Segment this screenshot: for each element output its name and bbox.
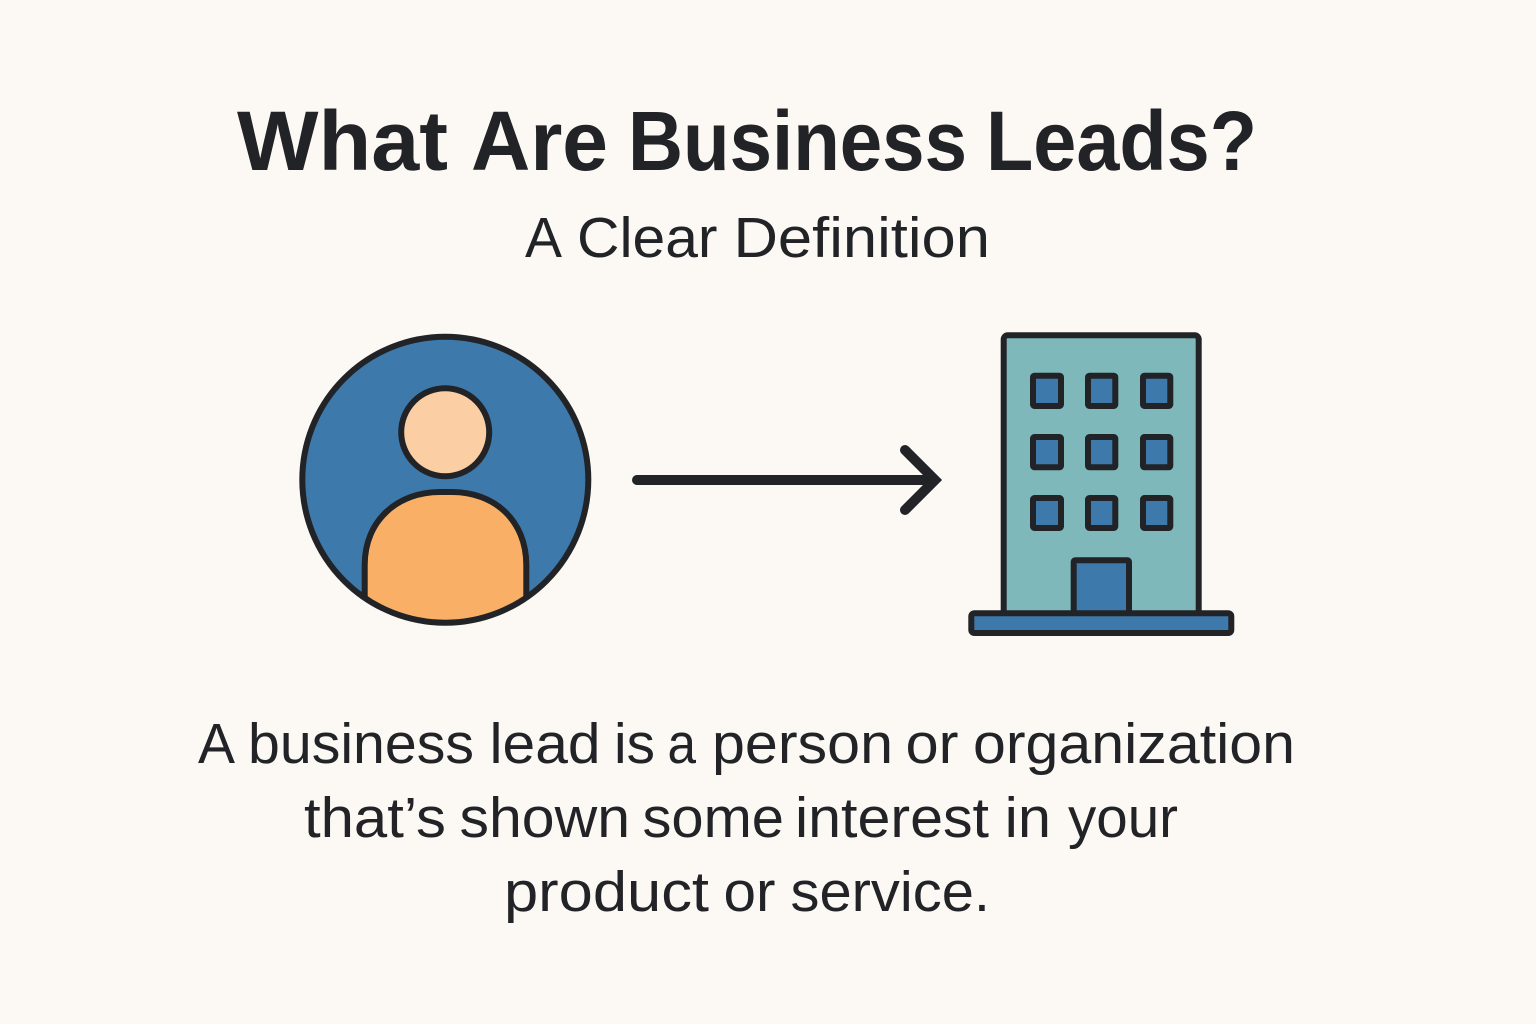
subtitle [525,206,990,270]
windows [1033,376,1170,528]
building body [1004,335,1199,615]
title [237,94,1257,188]
definition text: is [614,712,655,776]
door [1074,560,1129,615]
title: What [237,94,448,188]
icon: person in circle [302,337,588,640]
definition text: product [504,860,709,924]
person body [365,492,526,640]
definition text: A [198,712,235,776]
person head [401,388,489,476]
base [971,613,1231,633]
arrow [637,450,935,510]
definition text: some [642,786,784,850]
definition text: shown [460,786,630,850]
definition text: person [712,712,893,776]
icon: office building [971,335,1231,633]
definition text: service. [790,860,990,924]
definition text: in [1005,786,1051,850]
definition text: organization [973,712,1295,776]
definition text: or [906,712,959,776]
title: Business [628,94,967,188]
subtitle: Definition [734,206,990,270]
definition text: interest [795,786,989,850]
circle outline [302,337,588,623]
title: Leads? [986,94,1257,188]
definition text [198,712,1295,924]
definition text: business [248,712,474,776]
definition text: your [1068,786,1178,850]
definition text: a [668,712,696,776]
definition text: or [724,860,776,924]
subtitle: Clear [577,206,718,270]
definition text: that’s [304,786,446,850]
title: Are [471,94,608,188]
definition text: lead [490,712,600,776]
subtitle: A [525,206,562,270]
